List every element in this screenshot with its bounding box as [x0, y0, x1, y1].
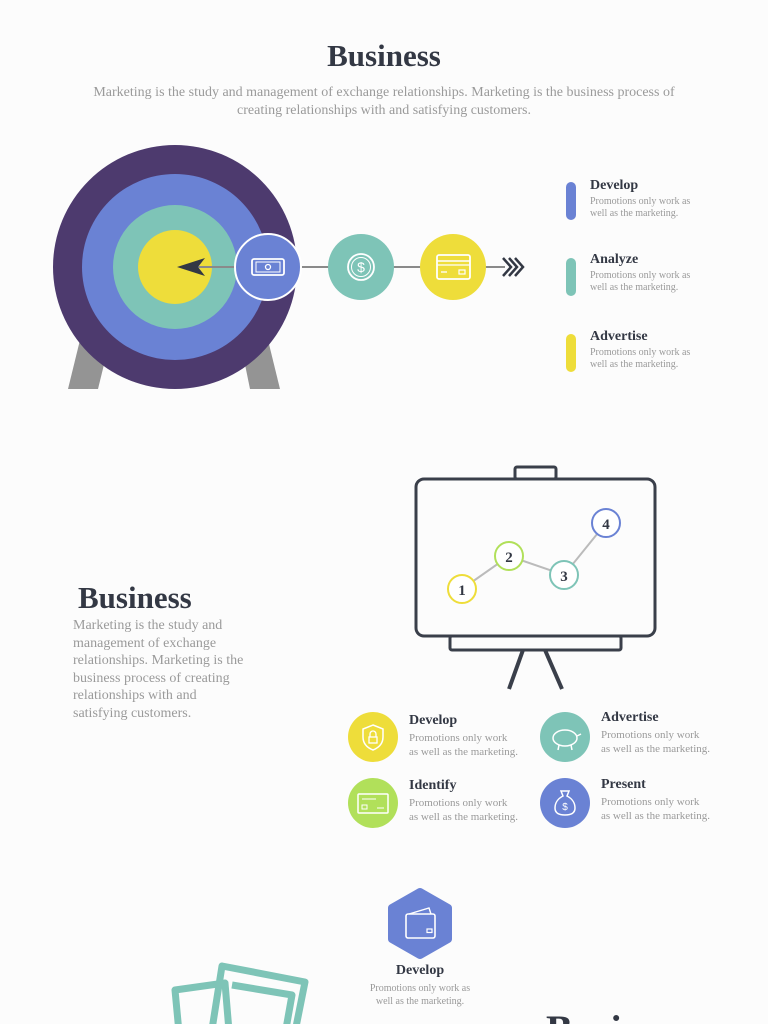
icon: coin: $: [357, 259, 365, 275]
title: Business: [327, 38, 441, 73]
legend text: analyze: well as the marketing.: [590, 282, 678, 293]
item: identify: [409, 778, 518, 823]
section 3 item: develop: Develop: [396, 963, 444, 978]
subtitle: Marketing is the study and management of exchange relationships. Marketing is the business process of creating relationships with and satisfying customers.: [93, 85, 675, 118]
section 3 item: develop: [370, 963, 470, 1007]
legend text: analyze: [590, 252, 690, 293]
icon: wallet hexagon: [392, 892, 448, 955]
item: present: Promotions only work: [601, 796, 699, 808]
line chart: 3: [560, 569, 568, 585]
icon: card: [420, 234, 486, 300]
icon: money bag: [540, 778, 590, 828]
icon: coin: [328, 234, 394, 300]
item: identify: as well as the marketing.: [409, 811, 518, 823]
item: present: Present: [601, 777, 646, 792]
legend text: analyze: Promotions only work as: [590, 270, 690, 281]
arrow: [177, 258, 523, 276]
item: advertise: as well as the marketing.: [601, 743, 710, 755]
legend text: advertise: well as the marketing.: [590, 359, 678, 370]
item: identify: Identify: [409, 778, 456, 793]
legend bars: [566, 182, 576, 372]
section 2 text: Marketing is the study and management of exchange relationships. Marketing is the business process of creating relationships with and satisfying customers.: [73, 618, 243, 720]
legend text: advertise: [590, 329, 690, 370]
legend text: develop: Develop: [590, 178, 638, 193]
target rings: [53, 145, 297, 389]
icon: bills: [175, 966, 305, 1024]
item: identify: Promotions only work: [409, 797, 507, 809]
line chart: 2: [505, 550, 513, 566]
icon grid: [348, 710, 710, 828]
item: advertise: [601, 710, 710, 755]
section 2 heading: Business: [78, 580, 192, 615]
icon: id card: [348, 778, 398, 828]
icon: money: [235, 234, 301, 300]
icon: shield: [348, 712, 398, 762]
item: develop: Develop: [409, 713, 457, 728]
legend text: develop: well as the marketing.: [590, 208, 678, 219]
item: advertise: Advertise: [601, 710, 659, 725]
line chart: 4: [602, 517, 610, 533]
item: present: as well as the marketing.: [601, 810, 710, 822]
line chart: [448, 509, 620, 603]
icon: money bag: $: [562, 802, 568, 813]
item: develop: [409, 713, 518, 758]
target legs: [68, 340, 280, 389]
legend text: advertise: Promotions only work as: [590, 347, 690, 358]
legend text: develop: [590, 178, 690, 219]
section 3 item: develop: well as the marketing.: [376, 996, 464, 1007]
section 3 item: develop: Promotions only work as: [370, 983, 470, 994]
legend text: advertise: Advertise: [590, 329, 648, 344]
presentation board: [416, 467, 655, 689]
section 3 graphics: [172, 888, 452, 1024]
legend text: develop: Promotions only work as: [590, 196, 690, 207]
target chart: [53, 145, 656, 690]
item: develop: as well as the marketing.: [409, 746, 518, 758]
item: present: [601, 777, 710, 822]
item: develop: Promotions only work: [409, 732, 507, 744]
line chart: 1: [458, 583, 466, 599]
icon: piggy: [540, 712, 590, 762]
legend text: analyze: Analyze: [590, 252, 638, 267]
item: advertise: Promotions only work: [601, 729, 699, 741]
